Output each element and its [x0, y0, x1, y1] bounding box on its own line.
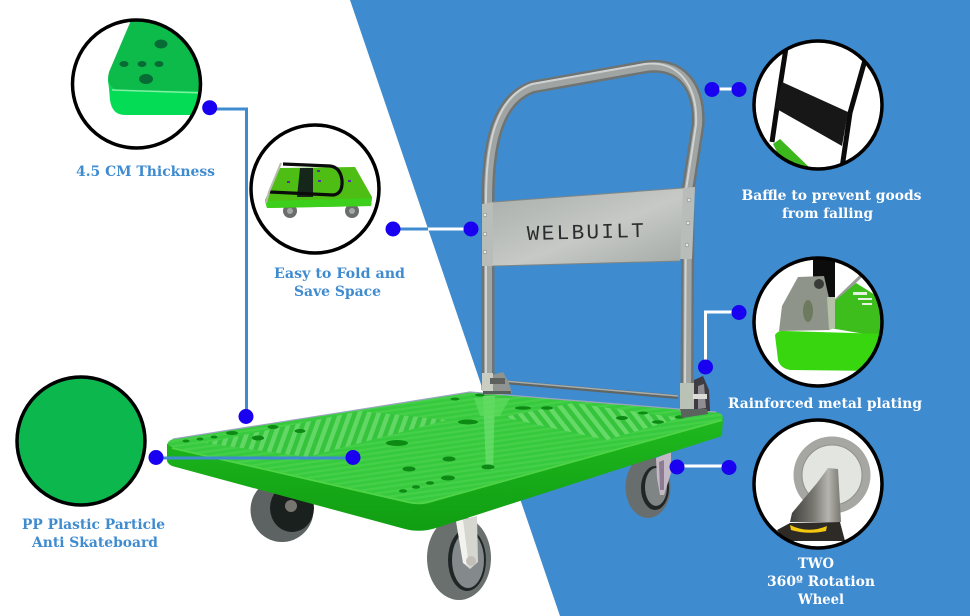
label: TWO 360 Rotation Wheel: TWO: [798, 556, 834, 572]
label: PP Plastic Particle Anti Skateboard: [22, 517, 165, 551]
wheel: front: [427, 516, 491, 600]
platform deck: top surface: [168, 392, 723, 502]
brand name: WELBUILT: WELBUILT: [527, 221, 644, 247]
hinge bracket: right: [680, 376, 710, 418]
platform deck: holes: [182, 394, 685, 493]
label: PP Plastic Particle Anti Skateboard: PP Plastic Particle: [22, 517, 165, 533]
wheel: back right: [626, 452, 671, 518]
background: blue diagonal panel: [350, 0, 970, 616]
callout line: metal plating: [706, 312, 739, 367]
platform deck: back rim: [173, 392, 716, 439]
baffle plate: [482, 187, 695, 266]
label: TWO 360 Rotation Wheel: [767, 556, 875, 608]
callout line: fold (white part): [428, 228, 471, 230]
detail circle: reinforced metal plating: [754, 255, 888, 386]
label: Baffle to prevent goods from falling: Baffle to prevent goods: [742, 188, 922, 204]
folding cross bar: [503, 381, 678, 397]
folding handle frame: [486, 64, 698, 392]
label: Baffle to prevent goods from falling: from falling: [782, 206, 873, 222]
callout line: fold (blue part): [393, 228, 428, 230]
label: Easy to Fold and Save Space: Save Space: [294, 284, 381, 300]
detail circle: folded cart: [251, 125, 379, 253]
label: Baffle to prevent goods from falling: [742, 188, 922, 222]
product photo: platform cart: [167, 64, 723, 600]
wheel: back left: [250, 478, 314, 542]
platform deck: left striped panel: [205, 411, 447, 457]
callout line: PP plastic: [156, 456, 353, 460]
platform deck: side edge: [167, 418, 723, 531]
callout dots: [148, 82, 746, 475]
platform deck: gloss reflection: [474, 396, 510, 470]
callout line: thickness: [210, 109, 246, 416]
platform deck: right striped panel: [503, 403, 680, 440]
detail circle: PP plastic texture: [17, 377, 145, 505]
hinge bracket: left: [482, 372, 512, 395]
callout line: rotation wheel: [677, 464, 729, 468]
detail circle: 360 rotation wheel: [754, 420, 882, 548]
label: PP Plastic Particle Anti Skateboard: Anti Skateboard: [31, 535, 158, 551]
label: Easy to Fold and Save Space: Easy to Fold and: [274, 266, 405, 282]
platform deck: front rim highlight: [172, 420, 722, 503]
label: 4.5 CM Thickness: 4.5 CM Thickness: [76, 164, 215, 180]
label: Rainforced metal plating: Rainforced metal plating: [728, 396, 922, 412]
callout line: baffle: [712, 88, 739, 90]
label: TWO 360 Rotation Wheel: 360º Rotation: [767, 574, 875, 590]
label: TWO 360 Rotation Wheel: Wheel: [797, 592, 844, 608]
detail circle: 4.5 cm thickness: [72, 18, 205, 148]
detail circle: baffle: [754, 41, 882, 169]
label: Easy to Fold and Save Space: [274, 266, 405, 300]
